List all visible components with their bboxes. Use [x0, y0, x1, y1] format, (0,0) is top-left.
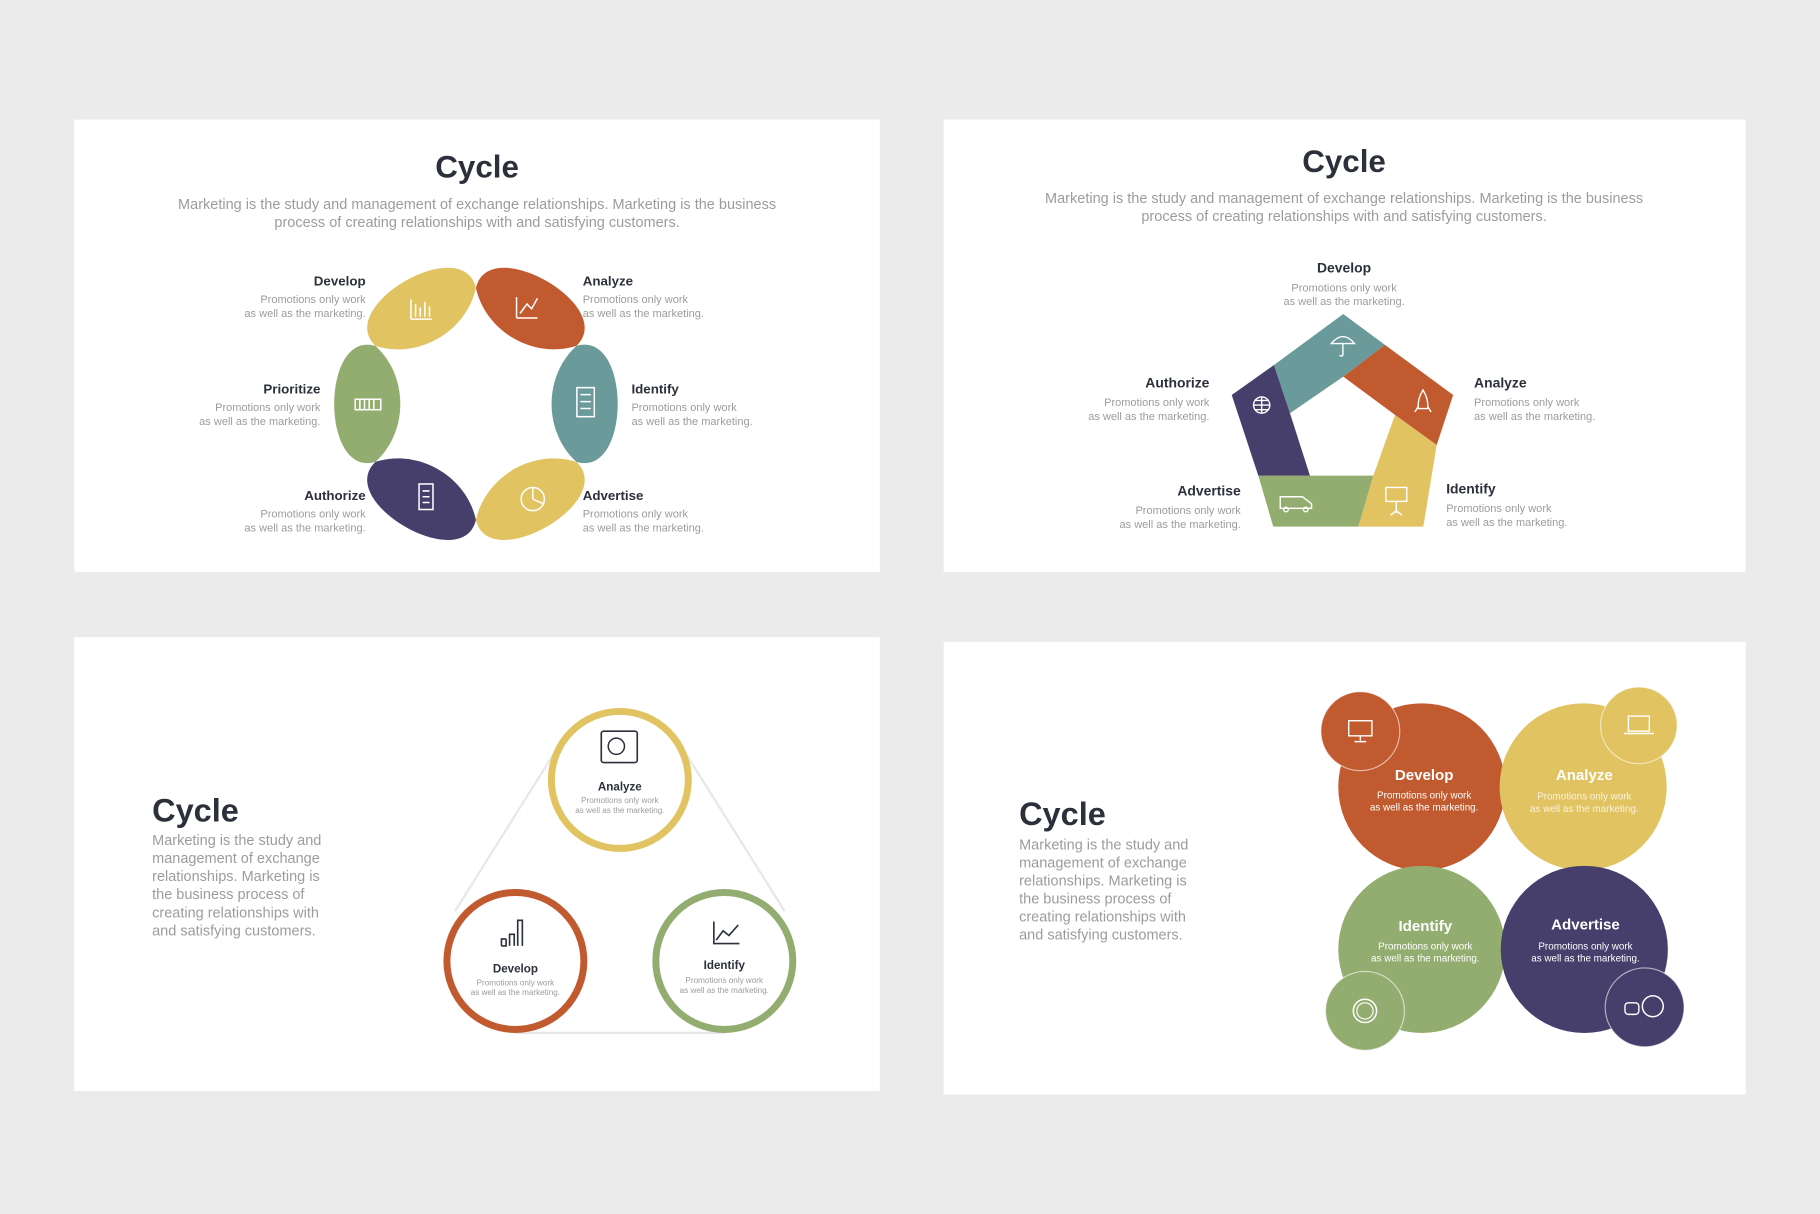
- bubble: Advertise: [1501, 866, 1684, 1047]
- labels: Promotions only work: [215, 402, 321, 414]
- panel: pentagon cycle: as well as the marketing.: [1474, 411, 1595, 423]
- labels: [199, 274, 366, 535]
- paragraph: Marketing is the study and: [152, 833, 321, 849]
- panel: flower cycle: Identify: [631, 381, 679, 396]
- paragraph: creating relationships with: [152, 905, 319, 921]
- panel: bubbles cycle: [944, 642, 1746, 1094]
- bubble: Advertise: as well as the marketing.: [1531, 954, 1640, 965]
- bubble: Develop: [1321, 692, 1505, 870]
- panel: flower cycle: Advertise: [583, 488, 643, 503]
- bubble: Identify: as well as the marketing.: [1371, 954, 1480, 965]
- labels: as well as the marketing.: [244, 523, 366, 535]
- panel: pentagon cycle: [944, 120, 1746, 572]
- circle: Identify: as well as the marketing.: [680, 986, 769, 995]
- title: Cycle: [152, 793, 239, 829]
- panel: pentagon cycle: as well as the marketing.: [1283, 296, 1405, 308]
- bubble: Analyze: as well as the marketing.: [1530, 804, 1639, 815]
- paragraph: the business process of: [1019, 892, 1172, 908]
- paragraph: relationships. Marketing is: [1019, 874, 1187, 890]
- subtitle: process of creating relationships with and satisfying customers.: [274, 215, 680, 231]
- bubble: Identify: [1325, 866, 1505, 1050]
- subtitle: process of creating relationships with and satisfying customers.: [1141, 209, 1547, 225]
- labels: Promotions only work: [260, 294, 366, 306]
- circle: Develop: as well as the marketing.: [471, 988, 560, 997]
- bubble: Identify: Promotions only work: [1378, 941, 1473, 952]
- labels: Develop: [314, 274, 366, 289]
- panel: pentagon cycle: Analyze: [1474, 375, 1527, 391]
- subtitle: Marketing is the study and management of exchange relationships. Marketing is the business: [1045, 191, 1643, 207]
- icons in petals: [355, 297, 594, 511]
- paragraph: creating relationships with: [1019, 910, 1186, 926]
- panel: flower cycle: as well as the marketing.: [583, 308, 704, 320]
- bubble: Advertise: Advertise: [1551, 917, 1620, 934]
- paragraph: management of exchange: [152, 851, 320, 867]
- panel: pentagon cycle: as well as the marketing.: [1120, 519, 1241, 531]
- labels: as well as the marketing.: [244, 308, 366, 320]
- pentagon chart: [1232, 314, 1453, 527]
- paragraph: relationships. Marketing is: [152, 869, 320, 885]
- circle: Analyze: as well as the marketing.: [575, 806, 664, 815]
- panel: pentagon cycle: Promotions only work: [1135, 505, 1241, 517]
- labels: Prioritize: [263, 381, 320, 396]
- labels: as well as the marketing.: [199, 416, 320, 428]
- circle: Identify: Promotions only work: [686, 976, 764, 985]
- labels: Promotions only work: [260, 509, 366, 521]
- circle: Identify: Identify: [704, 959, 745, 972]
- paragraph: Marketing is the study and: [1019, 838, 1188, 854]
- panel: pentagon cycle: Identify: [1446, 480, 1496, 496]
- panel: pentagon cycle: Promotions only work: [1291, 282, 1397, 294]
- panel: flower cycle: Promotions only work: [583, 509, 688, 521]
- panel: flower cycle: Promotions only work: [631, 402, 737, 414]
- paragraph: and satisfying customers.: [152, 923, 316, 939]
- bubble: Advertise: Promotions only work: [1538, 941, 1633, 952]
- panel: pentagon cycle: as well as the marketing.: [1446, 517, 1567, 529]
- bubble: Develop: Promotions only work: [1377, 791, 1471, 802]
- panel: flower cycle: as well as the marketing.: [631, 416, 753, 428]
- circle: Develop: Promotions only work: [477, 978, 555, 987]
- circle: Develop: Develop: [493, 963, 538, 976]
- panel: flower cycle: Analyze: [583, 274, 633, 289]
- panel: flower cycle: Promotions only work: [583, 294, 688, 306]
- triangle connector: [455, 752, 785, 1033]
- flower chart: [334, 251, 618, 556]
- panel: pentagon cycle: Promotions only work: [1474, 397, 1580, 409]
- bubble: Analyze: Promotions only work: [1537, 792, 1632, 803]
- labels: Authorize: [304, 488, 366, 503]
- title: Cycle: [1302, 144, 1386, 179]
- paragraph: and satisfying customers.: [1019, 928, 1183, 944]
- circle: Analyze: [551, 711, 688, 848]
- circle: Identify: [656, 893, 793, 1029]
- panel: flower cycle: [74, 120, 880, 572]
- bubble: Develop: Develop: [1395, 767, 1453, 784]
- title: Cycle: [435, 150, 519, 185]
- title: Cycle: [1019, 796, 1106, 832]
- circle: Analyze: Analyze: [598, 780, 642, 793]
- paragraph: management of exchange: [1019, 856, 1187, 872]
- circle: Analyze: Promotions only work: [581, 796, 660, 805]
- panel: pentagon cycle: Promotions only work: [1446, 503, 1552, 515]
- panel: pentagon cycle: Advertise: [1177, 483, 1241, 499]
- bubble: Analyze: [1500, 687, 1677, 870]
- icons in pentagon: [1254, 337, 1431, 515]
- subtitle: Marketing is the study and management of exchange relationships. Marketing is the business: [178, 197, 776, 213]
- labels: Develop: [1317, 260, 1371, 276]
- panel: pentagon cycle: as well as the marketing.: [1088, 411, 1209, 423]
- paragraph: the business process of: [152, 887, 305, 903]
- panel: pentagon cycle: Promotions only work: [1104, 397, 1210, 409]
- panel: pentagon cycle: Authorize: [1145, 375, 1210, 391]
- bubble: Develop: as well as the marketing.: [1370, 803, 1478, 814]
- panel: ring triangle cycle: [74, 637, 880, 1091]
- bubble: Identify: Identify: [1398, 918, 1453, 935]
- bubble: Analyze: Analyze: [1556, 767, 1613, 784]
- panel: flower cycle: as well as the marketing.: [583, 523, 704, 535]
- circle: Develop: [447, 893, 584, 1029]
